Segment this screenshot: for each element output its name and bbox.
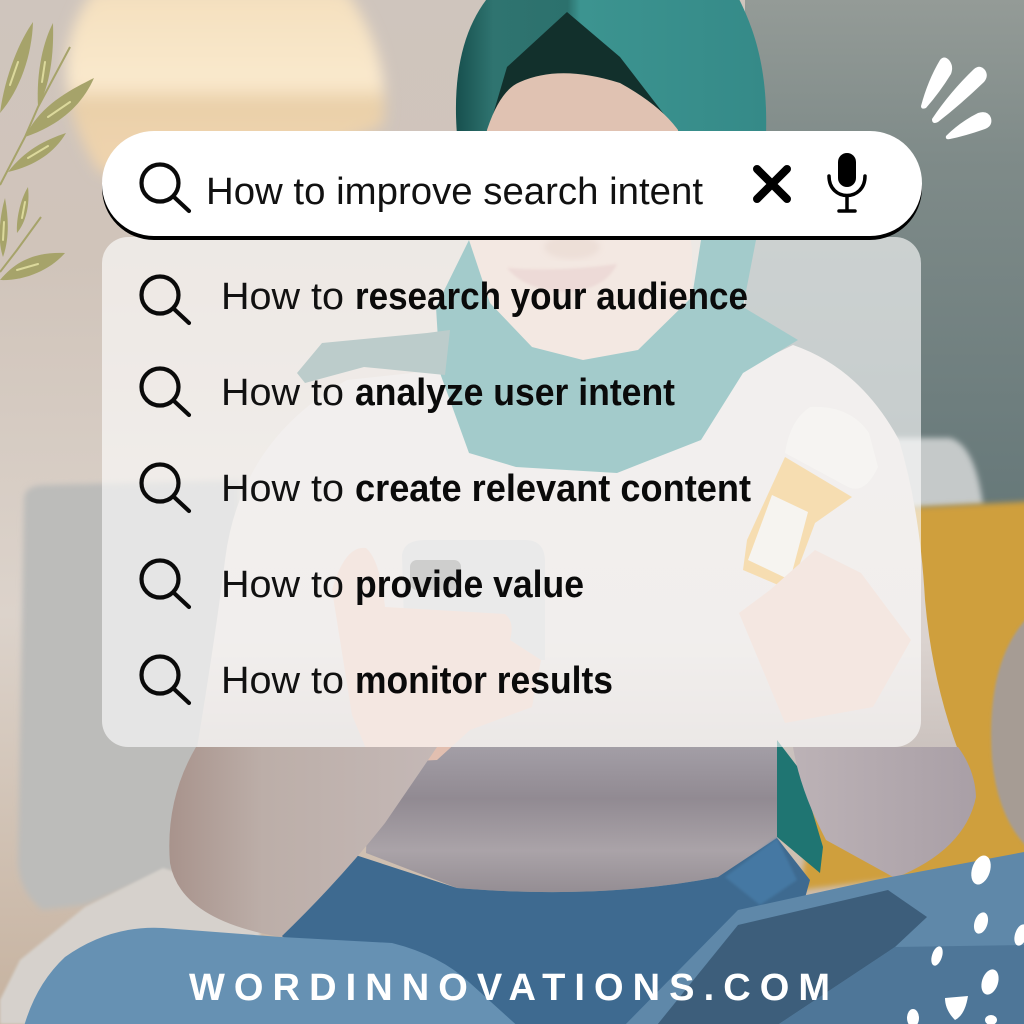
phone (402, 540, 545, 660)
search query: How to improve search intent (206, 171, 703, 213)
scarf neck and drape (436, 240, 798, 473)
suggestion 5: monitor results (355, 660, 613, 702)
search bar body (102, 131, 922, 236)
lips (507, 264, 617, 292)
scarf left tail (297, 330, 450, 383)
leaf highlights (3, 62, 70, 270)
suggestion 2 (142, 368, 675, 415)
teal scarf tail below panel (777, 740, 823, 873)
leaves (0, 22, 94, 280)
suggestion 2: How to (221, 372, 344, 414)
decoration: olive branch top left (0, 22, 94, 280)
website footer: WORDINNOVATIONS.COM (189, 967, 830, 1009)
sweater torso (366, 747, 777, 892)
suggestion 1: research your audience (355, 276, 748, 318)
suggestion 1 (142, 276, 748, 323)
jeans pocket highlight (725, 838, 797, 905)
sweater upper body (195, 345, 960, 770)
suggestion 4 (142, 560, 584, 607)
dark inner thigh (653, 890, 927, 1024)
lower leg (770, 945, 1024, 1024)
right sofa arm (991, 615, 1024, 850)
left sofa cushion (18, 480, 240, 910)
right white cushion (880, 438, 983, 510)
search bar (102, 131, 922, 240)
nose shading (544, 235, 600, 259)
hand with bottle (739, 550, 911, 723)
decoration: white burst top right (921, 58, 991, 139)
jeans waist (280, 838, 810, 1024)
suggestion 3: How to (221, 468, 344, 510)
translucent suggestions panel (102, 237, 921, 747)
suggestion 3: create relevant content (355, 468, 751, 510)
search bar shadow (102, 135, 922, 240)
left sleeve (169, 747, 437, 937)
suggestion 3 (142, 464, 751, 511)
suggestion 5: How to (221, 660, 344, 702)
sofa seat (0, 868, 260, 1024)
icon: microphone (829, 153, 865, 211)
lamp (66, 0, 385, 175)
right sleeve (793, 747, 976, 878)
phone camera (410, 560, 461, 590)
scarf shadow (487, 12, 680, 135)
pill bottle (743, 457, 852, 590)
left knee (23, 928, 522, 1024)
suggestion 4: How to (221, 564, 344, 606)
icon: close (757, 169, 787, 199)
hand with phone (332, 548, 541, 763)
yellow pillow (800, 500, 1024, 890)
suggestion 4: provide value (355, 564, 584, 606)
right thigh (620, 852, 1024, 1024)
decoration: white droplets bottom right (907, 853, 1024, 1024)
suggestion 1: How to (221, 276, 344, 318)
bottle label (748, 495, 808, 580)
bottle cap (785, 407, 878, 489)
suggestion 2: analyze user intent (355, 372, 675, 414)
suggestion 5 (142, 656, 613, 703)
head scarf (456, 0, 766, 135)
face (469, 73, 692, 360)
icon: search (142, 164, 189, 211)
branch stems (0, 47, 70, 272)
